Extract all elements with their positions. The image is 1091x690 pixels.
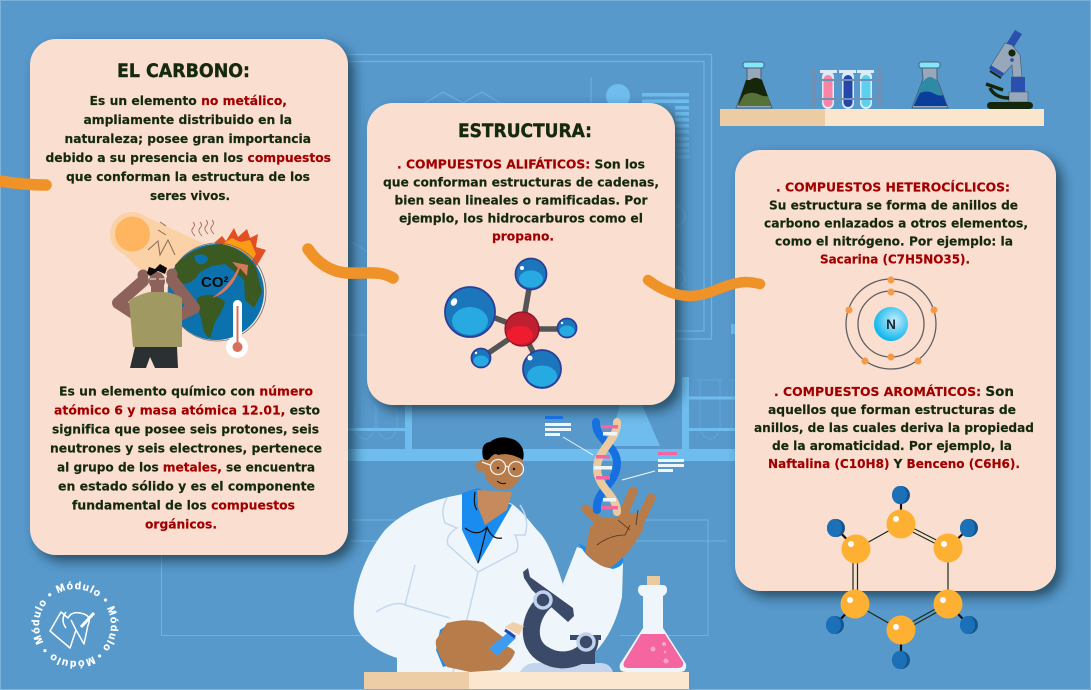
text block: aromaticos: . COMPUESTOS AROMÁTICOS: Son — [774, 384, 1014, 400]
hand left — [436, 623, 450, 667]
dna — [596, 422, 617, 510]
heading: estructura: ESTRUCTURA: — [458, 121, 592, 142]
icon: molecule — [445, 258, 576, 388]
text block: alifaticos: bien sean lineales o ramificadas. Por — [394, 192, 648, 208]
head — [476, 460, 488, 472]
illustration: scientist — [354, 416, 686, 672]
text block: alifaticos: ejemplo, los hidrocarburos como el — [399, 210, 643, 226]
text block: properties: atómico 6 y masa atómica 12.01, esto — [54, 402, 320, 418]
panel: el carbono — [30, 39, 348, 555]
sleeve right — [563, 547, 623, 660]
icon: benzene molecule — [826, 486, 978, 669]
text block: definition: que conforman la estructura de los — [66, 169, 310, 184]
text block: definition: naturaleza; posee gran importancia — [64, 131, 311, 146]
heading: el carbono: EL CARBONO: — [117, 61, 250, 82]
flask — [620, 585, 686, 672]
text block: aromaticos: de la aromaticidad. Por ejemplo, la — [772, 438, 1012, 453]
text block: properties: orgánicos. — [145, 516, 217, 532]
shirt — [462, 488, 512, 564]
text block: aromaticos: Naftalina (C10H8) Y Benceno (C6H6). — [768, 456, 1020, 471]
text block: properties: en estado sólido y es el componente — [58, 478, 315, 494]
icon: microscope — [986, 30, 1033, 109]
text block: heterociclicos — [764, 180, 1028, 266]
table: bottom — [364, 672, 689, 689]
icon: green flask — [736, 62, 772, 108]
connector: orange stroke left — [0, 180, 46, 185]
text block: heterociclicos: como el nitrógeno. Por ejemplo: la — [775, 234, 1013, 248]
text block: properties: neutrones y seis electrones, pertenece — [50, 440, 322, 456]
text block: properties: significa que posee seis protones, seis — [52, 422, 319, 436]
text block: heterociclicos: Su estructura se forma de anillos de — [769, 198, 1018, 212]
text block: definition — [46, 93, 331, 203]
text block: alifaticos: . COMPUESTOS ALIFÁTICOS: Son los — [397, 156, 645, 172]
text block: properties: al grupo de los metales, se encuentra — [57, 460, 315, 474]
illustration: climate change — [110, 212, 266, 368]
icon: test tube rack — [812, 68, 882, 109]
icon: nitrogen atom — [846, 276, 938, 369]
panel: estructura — [367, 103, 675, 405]
text block: aromaticos — [754, 384, 1034, 471]
text block: aromaticos: aquellos que forman estructuras de — [768, 402, 1016, 417]
text block: heterociclicos: carbono enlazados a otros elementos, — [764, 216, 1028, 230]
text block: definition: debido a su presencia en los compuestos — [46, 150, 331, 165]
text block: properties: Es un elemento químico con número — [59, 384, 313, 398]
illustration: climate change: CO² — [201, 274, 228, 291]
text block: properties: fundamental de los compuestos — [72, 498, 295, 512]
text block: heterociclicos: Sacarina (C7H5NO35). — [820, 252, 970, 266]
text block: alifaticos: propano. — [492, 228, 554, 244]
text block: properties — [50, 384, 322, 532]
icon: blue flask — [912, 62, 948, 108]
text block: definition: ampliamente distribuido en la — [84, 112, 292, 127]
text block: heterociclicos: . COMPUESTOS HETEROCÍCLICOS: — [776, 180, 1010, 194]
logo: modulo: Módulo • Módulo • Módulo • Módulo • — [31, 581, 119, 669]
microscope — [520, 663, 613, 672]
icon: nitrogen atom: N — [886, 317, 896, 332]
shelf: top right — [720, 109, 1044, 126]
text block: definition: Es un elemento no metálico, — [90, 93, 287, 108]
coat — [354, 494, 590, 672]
text block: aromaticos: anillos, de las cuales deriva la propiedad — [754, 420, 1034, 435]
text block: definition: seres vivos. — [150, 188, 230, 203]
text block: alifaticos — [383, 156, 659, 244]
connector: orange stroke right — [648, 280, 760, 296]
hand right — [585, 512, 644, 568]
text block: alifaticos: que conforman estructuras de cadenas, — [383, 174, 659, 190]
panel: heterociclicos y aromaticos — [735, 150, 1056, 591]
dna labels — [545, 416, 563, 419]
connector: orange stroke middle — [308, 249, 393, 278]
